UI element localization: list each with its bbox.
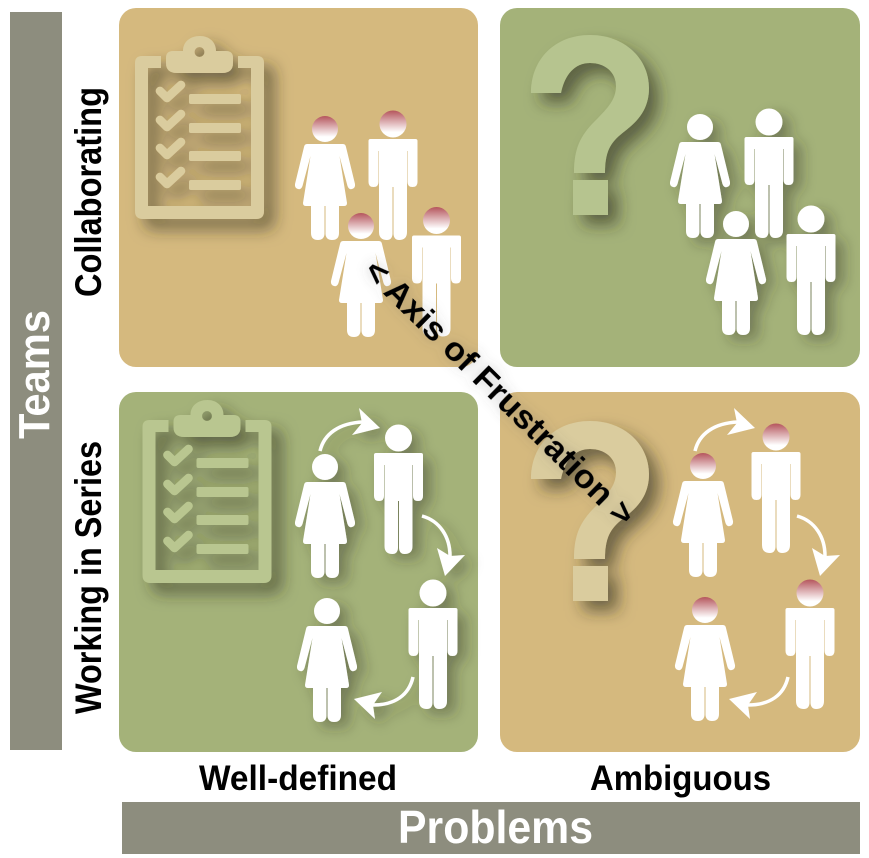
left axis bar: Teams: Teams bbox=[10, 310, 59, 439]
bottom axis bar: Problems: Problems bbox=[398, 801, 593, 853]
icon: question mark bbox=[531, 421, 649, 601]
team of four collaborating, frustrated heads bbox=[295, 110, 461, 337]
bottom axis bar: Problems bbox=[122, 801, 860, 854]
panel: collaborating, well-defined bbox=[119, 8, 478, 367]
icon: clipboard checklist bbox=[142, 400, 272, 583]
icon: clipboard checklist bbox=[135, 36, 264, 219]
team of four in series with arrows, frustrated heads bbox=[673, 408, 840, 721]
icon: question mark bbox=[531, 35, 649, 215]
diagonal label: axis of frustration: < Axis of Frustration > bbox=[357, 252, 643, 533]
panel: working in series, ambiguous bbox=[500, 392, 860, 752]
column label: Well-defined: Well-defined bbox=[199, 759, 397, 798]
left axis bar: Teams bbox=[10, 12, 62, 750]
panel: collaborating, ambiguous bbox=[500, 8, 860, 367]
team of four in series with arrows, white heads bbox=[295, 408, 465, 722]
arrows bbox=[695, 408, 840, 719]
row label: Working in Series: Working in Series bbox=[68, 441, 109, 714]
arrows bbox=[320, 408, 465, 719]
column label: Ambiguous: Ambiguous bbox=[590, 759, 771, 798]
panel: working in series, well-defined bbox=[119, 392, 478, 752]
row label: Collaborating: Collaborating bbox=[68, 87, 109, 297]
team of four collaborating, white heads bbox=[670, 108, 836, 335]
